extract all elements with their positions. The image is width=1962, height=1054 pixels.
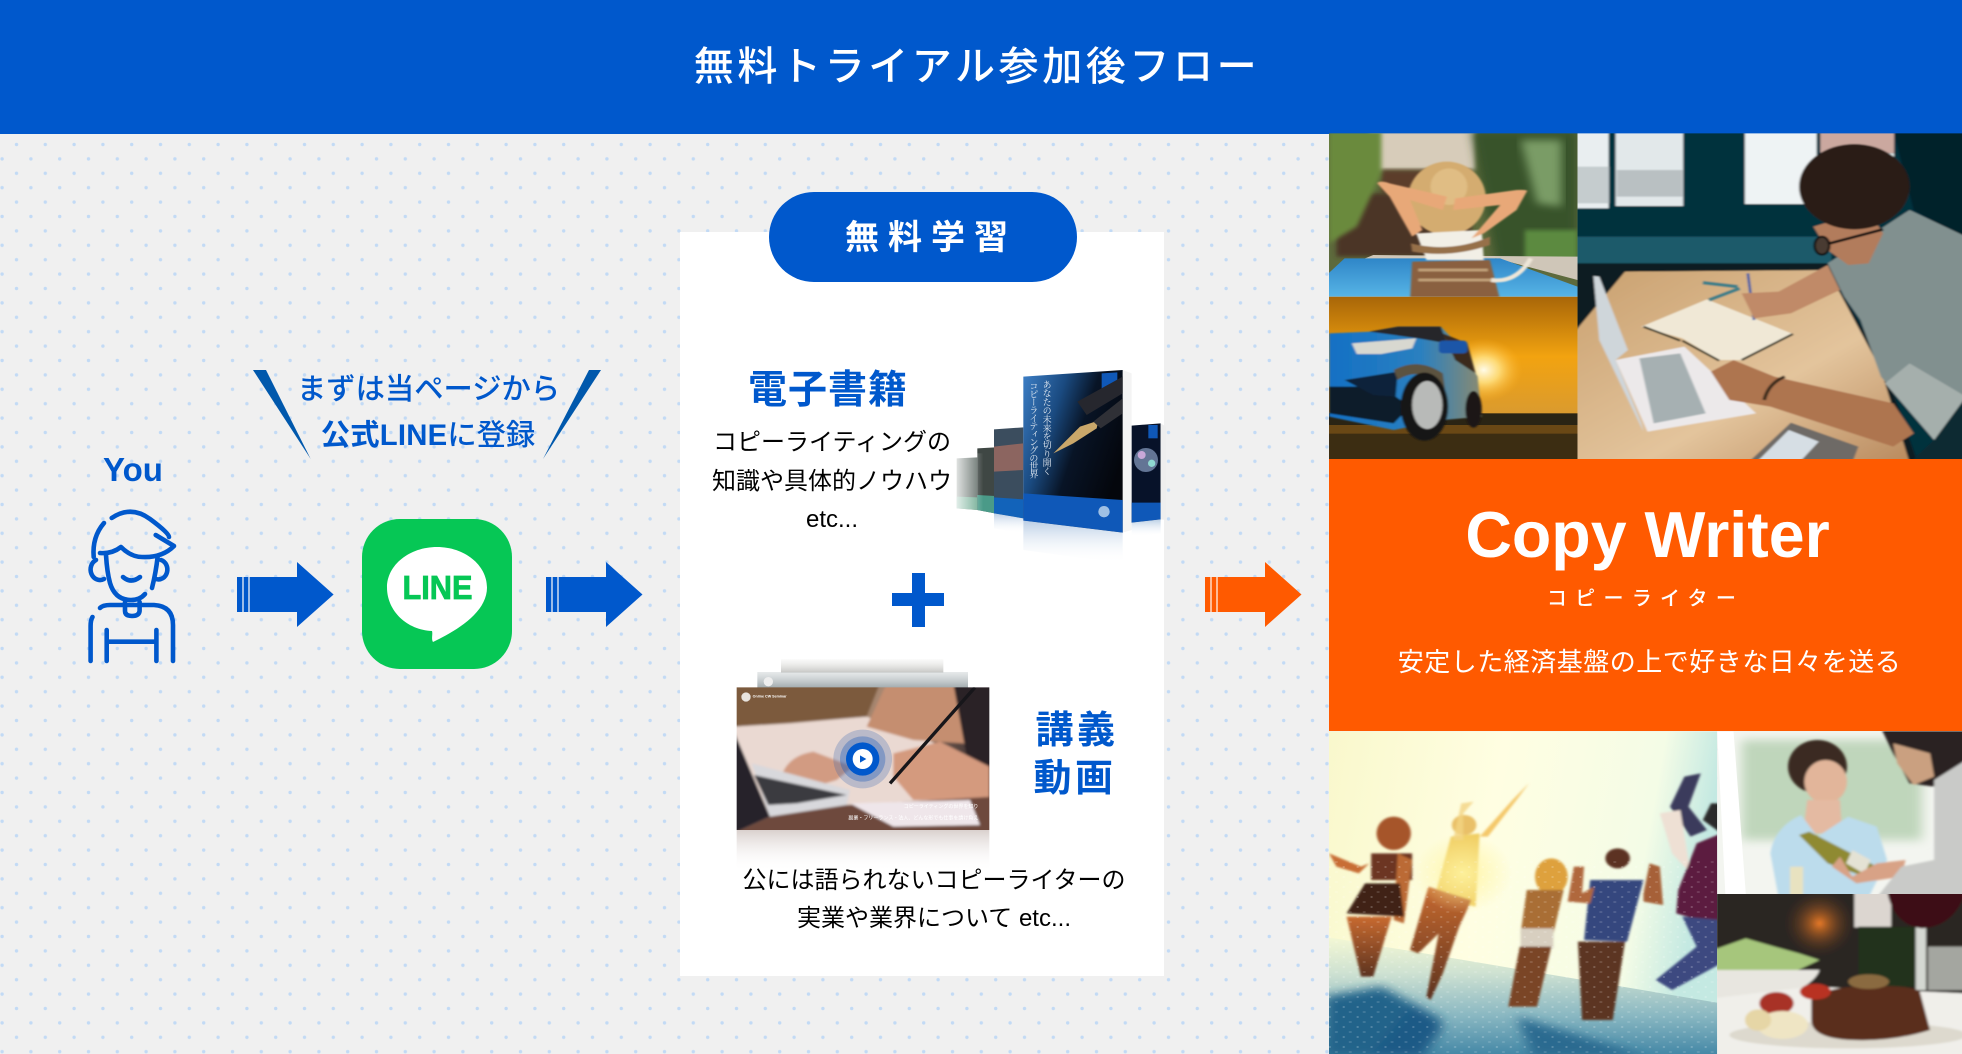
- text: ebooks description: etc...: [806, 506, 858, 533]
- callout line one: まずは当ページから: [297, 373, 560, 406]
- left slash: [253, 370, 310, 459]
- photo: man writing at laptop: [1573, 130, 1962, 463]
- subheading: katakana: コピーライター: [1547, 588, 1744, 610]
- photo: couple with wine: [1717, 728, 1962, 897]
- photo: car at sunset: [1329, 297, 1578, 459]
- right slash: [543, 370, 601, 459]
- panel: free learning: [680, 232, 1164, 976]
- book far back: [957, 457, 977, 510]
- video reflection: [737, 830, 989, 872]
- title: 無料トライアル参加後フロー: [694, 45, 1260, 89]
- photo: steak dinner: [1713, 887, 1962, 1054]
- pill heading: free learning: 無料学習: [845, 219, 1017, 257]
- figures: [1329, 773, 1721, 1020]
- middle video layer: [757, 672, 968, 688]
- callout: register on LINE: [253, 370, 601, 459]
- photo collage: upper lifestyle: [1329, 133, 1962, 459]
- arrow: you to LINE: [237, 562, 334, 627]
- label: You: You: [103, 451, 163, 488]
- book right: [1132, 423, 1161, 523]
- image: video lecture thumbnail: [736, 660, 990, 854]
- image: ebook covers: コピーライティングの世界: [1028, 382, 1038, 480]
- text: lecture description: 実業や業界について etc...: [797, 904, 1071, 932]
- image: ebook covers: あなたの未来を切り開く: [1042, 380, 1052, 476]
- text: lecture description: [742, 866, 1126, 932]
- text: ebooks description: [712, 429, 952, 533]
- heading: ebooks: 電子書籍: [748, 369, 908, 412]
- text: lecture description: 公には語られないコピーライターの: [742, 866, 1126, 894]
- photo: friends jumping on beach: [1325, 731, 1721, 1054]
- icon: plus: [892, 573, 944, 627]
- image: video lecture thumbnail: コピーライティングの世界を知り: [904, 803, 978, 810]
- book reflections: [1023, 521, 1123, 563]
- heading: lecture videos: [1033, 710, 1118, 800]
- text: lifestyle: 安定した経済基盤の上で好きな日々を送る: [1398, 647, 1901, 677]
- photo collage: lower lifestyle: [1329, 731, 1962, 1054]
- icon: LINE app: LINE: [402, 569, 472, 606]
- panel: copywriter: [1329, 459, 1962, 731]
- play button: [833, 730, 892, 788]
- icon: LINE app: [362, 519, 512, 669]
- rear video layer: [781, 659, 943, 673]
- pill heading: free learning: [769, 192, 1077, 282]
- heading: lecture videos: 動画: [1033, 758, 1116, 800]
- book back: [977, 447, 995, 513]
- image: video lecture thumbnail: 副業・フリーランス・法人、どんな形でも仕事を請け負え: [848, 814, 978, 821]
- photo: woman by the pool: [1325, 130, 1578, 300]
- icon: person: [88, 509, 176, 664]
- text: ebooks description: コピーライティングの: [713, 429, 951, 456]
- main book: [1123, 370, 1132, 533]
- text: ebooks description: 知識や具体的ノウハウ: [712, 468, 952, 494]
- callout line two: 公式LINEに登録: [321, 419, 535, 452]
- arrow: LINE to free learning: [546, 562, 642, 627]
- image: video lecture thumbnail: Online CW Seminar: [753, 695, 787, 699]
- heading: lecture videos: 講義: [1035, 710, 1118, 752]
- book mid: [994, 427, 1023, 518]
- arrow: to copywriter: [1205, 562, 1302, 627]
- image: ebook covers: [956, 370, 1164, 548]
- header band: [0, 0, 1962, 134]
- heading: Copy Writer: Copy Writer: [1465, 499, 1830, 571]
